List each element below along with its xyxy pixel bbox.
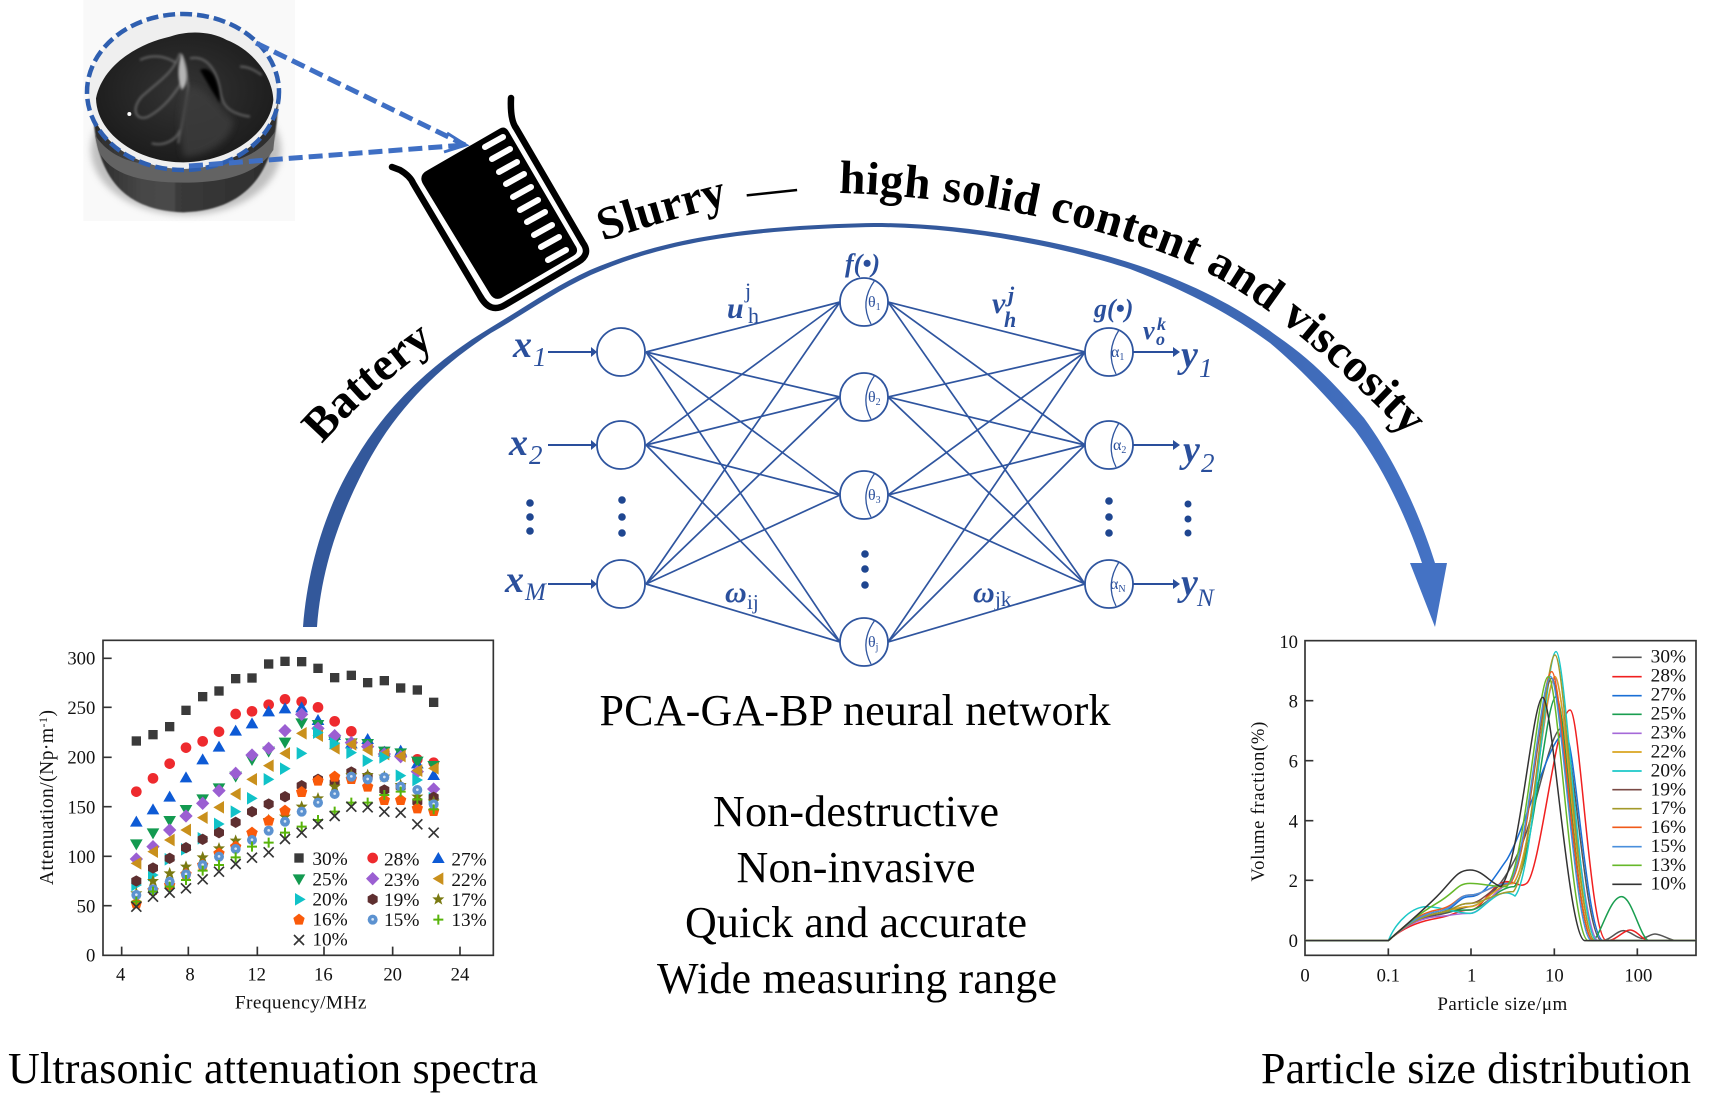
legend xyxy=(1612,647,1686,895)
y tick labels xyxy=(67,649,95,966)
legend: 16% xyxy=(312,910,348,931)
input and output labels: 2 xyxy=(1201,448,1214,478)
y tick labels: 8 xyxy=(1289,691,1298,712)
scatter chart: attenuation vs frequency xyxy=(67,640,493,1013)
legend: 15% xyxy=(384,910,419,931)
hidden nodes: θ xyxy=(868,294,876,311)
output nodes: 1 xyxy=(1119,352,1124,363)
text block: method advantages: Wide measuring range xyxy=(657,954,1057,1003)
curved heading: Battery: Battery xyxy=(300,326,428,444)
input nodes xyxy=(597,328,645,608)
icon: beaker xyxy=(392,98,586,308)
hidden nodes: θ xyxy=(868,634,876,651)
weight and function labels: ω xyxy=(725,576,747,609)
legend: 25% xyxy=(1651,704,1686,725)
text block: method advantages: Quick and accurate xyxy=(685,898,1027,947)
legend: 27% xyxy=(1651,685,1686,706)
legend: 16% xyxy=(1651,817,1686,838)
y axis title: attenuation: Attenuation/(Np·m xyxy=(37,728,58,885)
legend: 13% xyxy=(451,910,487,931)
y tick labels: 4 xyxy=(1289,811,1299,832)
legend xyxy=(299,849,487,951)
input and output labels: y xyxy=(1177,562,1198,604)
series 23% xyxy=(136,714,434,859)
series 15% xyxy=(136,777,434,895)
weight and function labels: jk xyxy=(994,587,1012,611)
legend: 19% xyxy=(384,890,419,911)
input and output labels: x xyxy=(512,324,532,366)
input and output labels: x xyxy=(504,559,524,601)
y tick labels: 2 xyxy=(1289,871,1298,892)
y axis title: attenuation: ) xyxy=(37,710,58,716)
legend: 10% xyxy=(1651,874,1686,895)
legend: 28% xyxy=(384,850,419,871)
hidden nodes: θ xyxy=(868,389,876,406)
weight and function labels: j xyxy=(1005,282,1015,307)
legend: 22% xyxy=(1651,741,1686,762)
hidden nodes: θ xyxy=(868,487,876,504)
legend: 30% xyxy=(312,849,348,870)
weight and function labels: ij xyxy=(747,590,759,614)
series 16% xyxy=(136,777,434,903)
input and output labels: N xyxy=(1196,585,1215,612)
input and output labels: 1 xyxy=(533,342,546,372)
x axis title: Particle size/μm xyxy=(1437,994,1568,1015)
legend: 17% xyxy=(451,890,487,911)
photo: jar of black battery slurry xyxy=(83,0,295,221)
y tick labels: 10 xyxy=(1279,632,1298,653)
weight and function labels: v xyxy=(1143,316,1155,345)
legend: 30% xyxy=(1651,647,1686,668)
x tick labels: 0 xyxy=(1300,966,1310,987)
input and output labels: 2 xyxy=(529,440,542,470)
weight and function labels: h xyxy=(748,303,759,328)
x tick labels: 0.1 xyxy=(1377,966,1400,987)
caption: Particle size distribution: Particle size distribution xyxy=(1261,1044,1691,1093)
y tick labels: 200 xyxy=(67,748,95,769)
legend: 20% xyxy=(312,890,348,911)
legend: 22% xyxy=(451,870,487,891)
input and output labels: 1 xyxy=(1199,353,1212,383)
caption: Ultrasonic attenuation spectra: Ultrasonic attenuation spectra xyxy=(8,1044,538,1093)
legend: 27% xyxy=(451,850,487,871)
y tick labels xyxy=(1279,632,1299,952)
legend: 13% xyxy=(1651,855,1686,876)
legend: 25% xyxy=(312,869,348,890)
series 19% xyxy=(136,772,434,881)
weight and function labels: v xyxy=(992,287,1006,320)
weight and function labels: u xyxy=(727,292,744,325)
y tick labels: 300 xyxy=(67,649,95,670)
heading: PCA-GA-BP neural network: PCA-GA-BP neural network xyxy=(600,686,1110,735)
weight and function labels: g(•) xyxy=(1093,294,1133,323)
text block: method advantages: Non-invasive xyxy=(736,843,976,892)
dashed callout: jar to beaker xyxy=(87,14,466,170)
hidden nodes: 3 xyxy=(876,495,881,506)
x tick labels: 8 xyxy=(185,965,195,986)
x tick labels: 100 xyxy=(1624,966,1652,987)
weight and function labels: f(•) xyxy=(845,249,880,278)
series 25% xyxy=(136,723,434,844)
output nodes: N xyxy=(1118,584,1126,595)
ellipsis dots xyxy=(526,496,1192,589)
arrow: curved arc from spectra to particle size xyxy=(303,223,1447,627)
heading dash: — xyxy=(743,157,800,218)
x tick labels: 4 xyxy=(116,965,126,986)
y tick labels: 250 xyxy=(67,698,95,719)
curved heading: high solid content and viscosity: high solid content and viscosity xyxy=(840,160,1423,433)
hidden nodes: 2 xyxy=(876,397,881,408)
arrows in and out xyxy=(548,347,1180,589)
input and output labels: x xyxy=(508,422,528,464)
x tick labels: 1 xyxy=(1467,966,1476,987)
text block: method advantages xyxy=(657,787,1057,1003)
output nodes xyxy=(1085,328,1133,608)
legend: 17% xyxy=(1651,798,1686,819)
x tick labels: 24 xyxy=(451,965,470,986)
output nodes: α xyxy=(1113,437,1121,454)
series 28% xyxy=(136,699,434,792)
series 20% xyxy=(136,733,434,885)
hidden nodes: 1 xyxy=(876,302,881,313)
text block: method advantages: Non-destructive xyxy=(713,787,999,836)
y tick labels: 0 xyxy=(1289,931,1298,952)
legend: 19% xyxy=(1651,779,1686,800)
series 17% xyxy=(136,775,434,893)
input and output labels xyxy=(504,324,1215,612)
legend: 23% xyxy=(384,870,419,891)
hidden nodes xyxy=(840,278,888,666)
input and output labels: y xyxy=(1179,429,1200,471)
input and output labels: y xyxy=(1177,334,1198,376)
x axis title: Frequency/MHz xyxy=(235,992,367,1013)
weight and function labels: j xyxy=(744,278,751,303)
output nodes: α xyxy=(1111,344,1119,361)
weight and function labels: o xyxy=(1156,329,1165,349)
x tick labels: 20 xyxy=(383,965,402,986)
series 10% xyxy=(136,807,434,907)
weight and function labels: k xyxy=(1157,314,1166,334)
x tick labels: 10 xyxy=(1545,966,1564,987)
legend: 20% xyxy=(1651,760,1686,781)
y tick labels: 6 xyxy=(1289,751,1298,772)
y axis title: attenuation: -1 xyxy=(36,717,50,727)
y tick labels: 100 xyxy=(67,847,95,868)
y tick labels: 0 xyxy=(86,945,95,966)
y tick labels: 50 xyxy=(77,896,95,917)
y axis title: Volume fraction(%) xyxy=(1248,722,1269,882)
weight and function labels: h xyxy=(1004,307,1016,332)
series 13% xyxy=(136,792,434,902)
x tick labels xyxy=(1300,966,1652,987)
hidden nodes: j xyxy=(875,642,878,653)
x tick labels xyxy=(116,965,470,986)
legend: 15% xyxy=(1651,836,1686,857)
series 22% xyxy=(136,733,434,863)
dashed ring around jar rim xyxy=(87,14,279,170)
output nodes: α xyxy=(1110,576,1118,593)
weight and function labels: ω xyxy=(973,576,995,609)
x tick labels: 12 xyxy=(247,965,266,986)
series 27% xyxy=(136,707,434,822)
legend: 10% xyxy=(312,930,348,951)
curves xyxy=(1305,652,1696,941)
output nodes: 2 xyxy=(1121,445,1126,456)
curved heading: Slurry: Slurry xyxy=(598,184,723,240)
legend: 28% xyxy=(1651,666,1686,687)
line chart: particle size distribution xyxy=(1248,632,1696,1015)
series 30% xyxy=(136,661,434,741)
legend: 23% xyxy=(1651,723,1686,744)
y tick labels: 150 xyxy=(67,797,95,818)
x tick labels: 16 xyxy=(314,965,333,986)
input and output labels: M xyxy=(524,579,547,606)
weight and function labels xyxy=(725,249,1166,614)
neural network diagram xyxy=(504,249,1215,666)
